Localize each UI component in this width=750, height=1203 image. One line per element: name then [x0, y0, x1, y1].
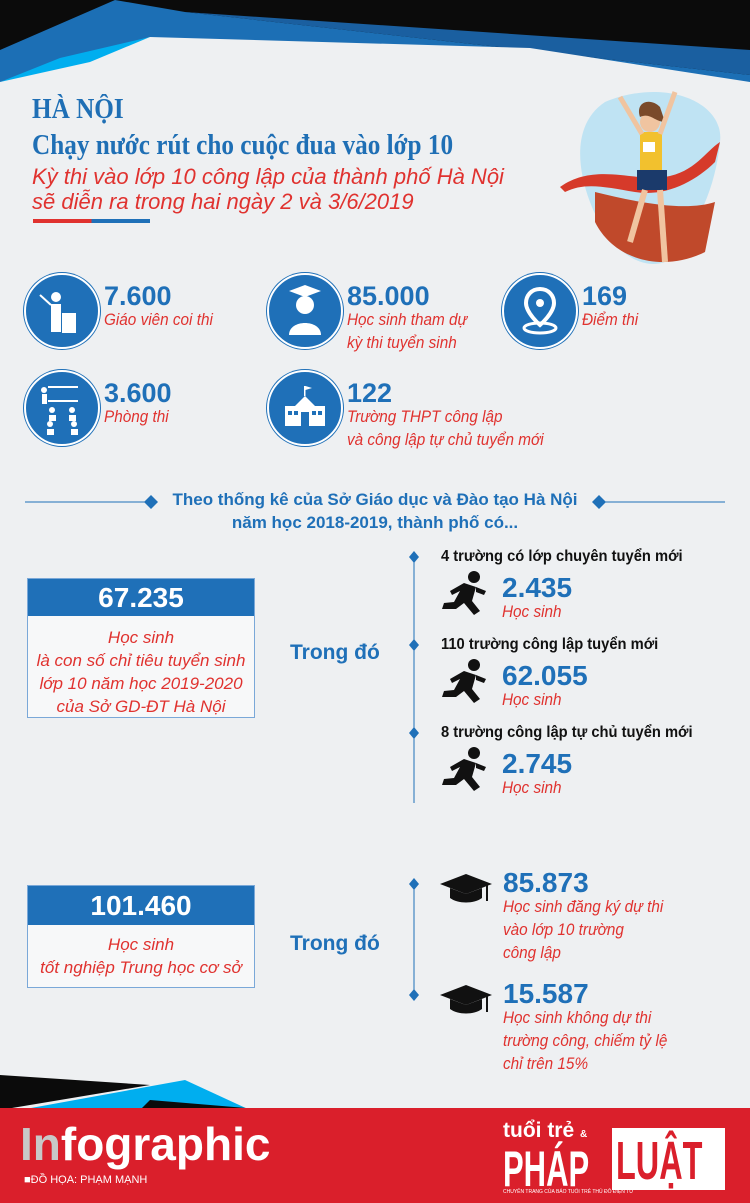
item: 2.745 [441, 724, 693, 797]
item: 2.745: 2.745 [502, 748, 572, 779]
item: 62.055 [441, 636, 658, 709]
stat: teachers: 7.600 [104, 281, 172, 311]
title: Chạy nước rút cho cuộc đua vào lớp 10 [32, 130, 453, 161]
item: 62.055: 62.055 [502, 660, 588, 691]
item: 2.435: Học sinh [502, 602, 562, 621]
header background shapes [0, 0, 750, 82]
logo: tuổi trẻ & [503, 1119, 587, 1142]
underline bar [33, 219, 150, 223]
title [32, 94, 453, 161]
subtitle [32, 164, 504, 214]
stat: locations: Điểm thi [582, 310, 638, 329]
title: HÀ NỘI [32, 94, 124, 125]
item: 15.587 [440, 978, 667, 1073]
item: 2.435: 2.435 [502, 572, 572, 603]
icon: school [267, 370, 343, 446]
item: 85.873: vào lớp 10 trường [503, 920, 624, 939]
stat: rooms: Phòng thi [104, 407, 169, 426]
item: 15.587: chỉ trên 15% [503, 1054, 588, 1073]
icon: grad cap [440, 985, 492, 1014]
footer band [0, 1108, 750, 1203]
item: 2.745: 8 trường công lập tự chủ tuyển mới [441, 724, 693, 741]
icon: runner [442, 747, 486, 791]
item: 62.055: 110 trường công lập tuyển mới [441, 636, 658, 653]
item: 15.587: trường công, chiếm tỷ lệ [503, 1031, 667, 1050]
icon: teacher [24, 273, 100, 349]
icon: runner [442, 571, 486, 615]
icon: map pin [502, 273, 578, 349]
label: Trong đó 1: Trong đó [290, 641, 380, 664]
logo: CHUYÊN TRANG CỦA BÁO TUỔI TRẺ THỦ ĐÔ ĐIỆN TỬ [503, 1189, 634, 1195]
stat: locations: 169 [582, 281, 627, 311]
box: 67.235: Học sinh [108, 628, 174, 647]
credit: ■ĐỒ HỌA: PHẠM MẠNH [24, 1174, 147, 1186]
stat: schools: 122 [347, 378, 392, 408]
stat: locations [501, 272, 638, 350]
item: 15.587: 15.587 [503, 978, 589, 1009]
logo [503, 1119, 725, 1197]
section heading: Theo thống kê của Sở Giáo dục và Đào tạo Hà Nội [172, 490, 578, 509]
stat: rooms: 3.600 [104, 378, 172, 408]
timeline 1 [409, 551, 419, 803]
footer title: Infographic [20, 1118, 270, 1170]
icon: classroom [24, 370, 100, 446]
stat: students: kỳ thi tuyển sinh [347, 333, 457, 352]
box: 67.235: 67.235 [98, 582, 184, 613]
box: 67.235: lớp 10 năm học 2019-2020 [39, 674, 243, 693]
box: 101.460 [27, 885, 255, 988]
stat: teachers: Giáo viên coi thi [104, 310, 213, 329]
box: 67.235: của Sở GD-ĐT Hà Nội [56, 697, 225, 716]
stat: rooms [23, 369, 172, 447]
box: 101.460: tốt nghiệp Trung học cơ sở [40, 958, 242, 977]
timeline 2 [409, 878, 419, 1001]
box: 67.235 [27, 578, 255, 718]
stat: students: Học sinh tham dự [347, 310, 467, 329]
logo: LUẬT [616, 1131, 702, 1191]
footer triangles [0, 1075, 246, 1108]
illustration: runner [560, 91, 720, 264]
section heading [25, 490, 725, 532]
item: 2.435 [441, 548, 683, 621]
stat: students [266, 272, 468, 352]
stat: schools: và công lập tự chủ tuyển mới [347, 430, 544, 449]
item: 85.873: Học sinh đăng ký dự thi [503, 897, 663, 916]
icon: graduate [267, 273, 343, 349]
item: 2.435: 4 trường có lớp chuyên tuyển mới [441, 548, 683, 565]
item: 85.873 [440, 867, 664, 962]
stat: schools: Trường THPT công lập [347, 407, 503, 426]
icon: grad cap [440, 874, 492, 902]
stat: schools [266, 369, 544, 449]
item: 15.587: Học sinh không dự thi [503, 1008, 651, 1027]
item: 85.873: công lập [503, 943, 561, 962]
box: 101.460: 101.460 [90, 890, 192, 921]
label: Trong đó 2: Trong đó [290, 932, 380, 955]
icon: runner [442, 659, 486, 703]
item: 2.745: Học sinh [502, 778, 562, 797]
subtitle: Kỳ thi vào lớp 10 công lập của thành phố Hà Nội [32, 164, 504, 189]
item: 62.055: Học sinh [502, 690, 562, 709]
logo: PHÁP [503, 1141, 589, 1197]
box: 101.460: Học sinh [108, 935, 174, 954]
item: 85.873: 85.873 [503, 867, 589, 898]
subtitle: sẽ diễn ra trong hai ngày 2 và 3/6/2019 [32, 189, 414, 214]
stat: students: 85.000 [347, 281, 430, 311]
stat: teachers [23, 272, 214, 350]
section heading: năm học 2018-2019, thành phố có... [232, 513, 518, 532]
box: 67.235: là con số chỉ tiêu tuyển sinh [37, 651, 245, 670]
